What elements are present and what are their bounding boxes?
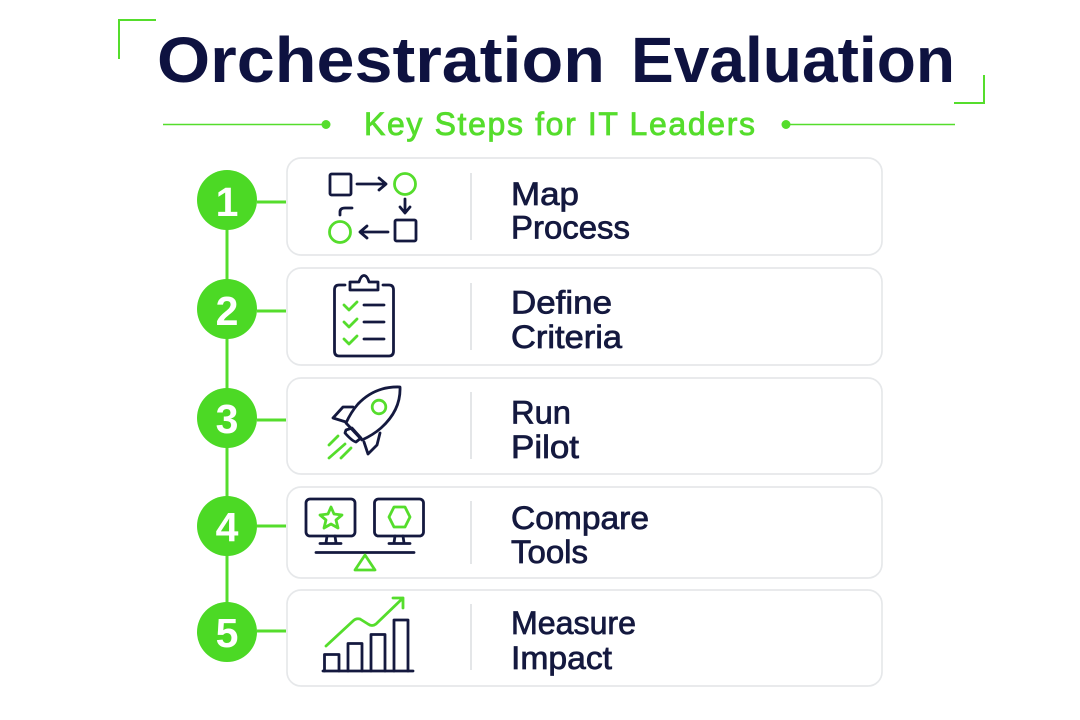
step 3: run pilot bbox=[197, 378, 882, 474]
step 3 label: Run bbox=[511, 394, 571, 430]
icon: rocket bbox=[329, 387, 400, 458]
number badge 3 bbox=[197, 388, 257, 448]
header bbox=[119, 20, 984, 142]
title: Orchestration bbox=[157, 24, 605, 96]
step 5: measure impact bbox=[197, 590, 882, 686]
step 2: define criteria bbox=[197, 268, 882, 365]
step 4 label bbox=[511, 500, 649, 570]
title: Evaluation bbox=[631, 24, 955, 96]
panel: step 2 card bbox=[287, 268, 882, 365]
panel: step 1 card bbox=[287, 158, 882, 255]
step 3 label bbox=[511, 394, 579, 465]
corner bracket: bottom right bbox=[954, 75, 984, 103]
step 2 label: Criteria bbox=[511, 319, 622, 355]
title bbox=[157, 24, 955, 96]
step 1 label: Map bbox=[511, 176, 579, 212]
subtitle rule: left bbox=[163, 120, 330, 129]
panel: step 4 card bbox=[287, 487, 882, 578]
number badge 1: 1 bbox=[216, 179, 238, 225]
icon: process flow bbox=[330, 174, 416, 242]
step 1 label bbox=[511, 176, 630, 246]
number badge 2: 2 bbox=[216, 288, 238, 334]
number badge 5: 5 bbox=[216, 610, 238, 656]
icon: rising bar chart bbox=[323, 598, 413, 671]
step 5 label: Impact bbox=[511, 640, 612, 676]
panel: step 5 card bbox=[287, 590, 882, 686]
panel: step 3 card bbox=[287, 378, 882, 474]
number badge 4 bbox=[197, 496, 257, 556]
step 4 label: Tools bbox=[511, 534, 588, 570]
icon: clipboard checklist bbox=[334, 276, 394, 356]
number badge 2 bbox=[197, 279, 257, 339]
number badge 5 bbox=[197, 602, 257, 662]
timeline connector bbox=[226, 225, 228, 610]
number badge 4: 4 bbox=[216, 504, 239, 550]
step 2 label bbox=[511, 284, 622, 355]
step 2 label: Define bbox=[511, 284, 612, 320]
step 5 label: Measure bbox=[511, 605, 636, 641]
number badge 1 bbox=[197, 170, 257, 230]
step 4 label: Compare bbox=[511, 500, 649, 536]
corner bracket: top left bbox=[119, 20, 156, 59]
step 4: compare tools bbox=[197, 487, 882, 578]
step 1: map process bbox=[197, 158, 882, 255]
number badge 3: 3 bbox=[216, 396, 238, 442]
step 3 label: Pilot bbox=[511, 429, 579, 465]
subtitle rule: right bbox=[782, 120, 955, 129]
step 1 label: Process bbox=[511, 210, 630, 246]
step 5 label bbox=[511, 605, 636, 676]
subtitle: Key Steps for IT Leaders bbox=[364, 106, 755, 142]
icon: comparing monitors on a scale bbox=[306, 499, 424, 570]
